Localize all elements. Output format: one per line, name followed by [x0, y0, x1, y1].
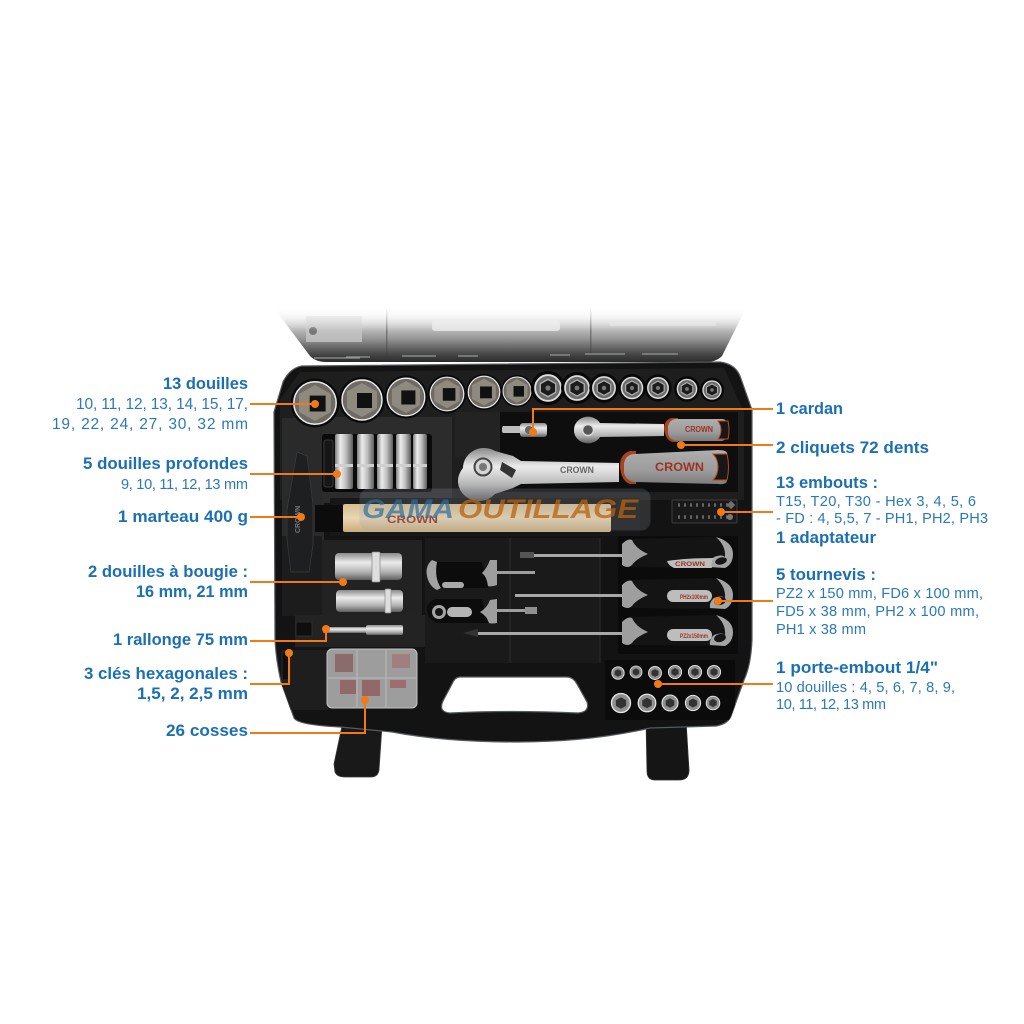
callout: 13 douilles: 10, 11, 12, 13, 14, 15, 17,: [76, 396, 248, 413]
short screwdriver top: [427, 560, 535, 590]
callout: 5 douilles profondes: [83, 455, 341, 493]
hex keys: [282, 622, 312, 680]
callout: 13 embouts: T15, T20, T30 - Hex 3, 4, 5, 6: [776, 494, 976, 510]
callout: 13 embouts: 1 adaptateur: [776, 529, 877, 547]
callout: 5 tournevis: FD5 x 38 mm, PH2 x 100 mm,: [776, 604, 979, 620]
callout: 5 tournevis: PH1 x 38 mm: [776, 622, 866, 638]
cardan: [502, 423, 547, 437]
case body: [274, 362, 752, 742]
callout: 3 cles hexagonales: [84, 649, 293, 703]
watermark GAMA OUTILLAGE: OUTILLAGE: [458, 494, 639, 524]
callout: 13 douilles: 19, 22, 24, 27, 30, 32 mm: [52, 416, 248, 433]
right latch: [646, 720, 689, 780]
screwdriver 3: [463, 615, 733, 646]
hammer: [287, 452, 611, 572]
large ratchet: CROWN: [560, 465, 594, 475]
extension bar: [323, 625, 403, 635]
watermark GAMA OUTILLAGE: [360, 489, 650, 530]
callout: 2 douilles a bougie: [88, 563, 347, 601]
callout: 2 cliquets: 2 cliquets 72 dents: [776, 439, 929, 457]
callout: 3 cles hexagonales: 1,5, 2, 2,5 mm: [137, 685, 248, 703]
small socket set: [612, 665, 721, 712]
callout: 13 douilles: 13 douilles: [163, 375, 248, 393]
callout: 13 embouts: [717, 474, 988, 547]
callout: 2 cliquets: [677, 439, 929, 457]
screwdriver 3: PZ2x150mm: [680, 634, 708, 640]
screwdriver 2: [515, 578, 733, 609]
screwdriver 1: CROWN: [675, 562, 705, 568]
callout: 13 douilles: [52, 375, 319, 433]
callout: 1 porte-embout: 1 porte-embout 1/4": [776, 659, 938, 677]
callout: 1 cardan: 1 cardan: [776, 400, 843, 418]
left latch: [334, 726, 382, 777]
small ratchet: CROWN: [685, 425, 713, 434]
callout: 5 tournevis: PZ2 x 150 mm, FD6 x 100 mm,: [776, 586, 983, 602]
callout: 13 embouts: 13 embouts :: [776, 474, 878, 492]
13 sockets row: [291, 371, 724, 427]
callout: 1 rallonge: 1 rallonge 75 mm: [113, 631, 248, 649]
callout: 5 tournevis: [714, 566, 983, 638]
embouts: [672, 500, 737, 523]
callout: 13 embouts: - FD : 4, 5,5, 7 - PH1, PH2, PH3: [776, 511, 988, 527]
callout: 1 marteau: [118, 508, 305, 526]
callout: 26 cosses: [166, 696, 369, 740]
callout: 1 porte-embout: 10, 11, 12, 13 mm: [776, 697, 886, 713]
callout: 26 cosses: 26 cosses: [166, 722, 248, 740]
callout: 1 cardan: [529, 400, 843, 436]
callout: 1 porte-embout: [654, 659, 955, 713]
callout: 5 douilles profondes: 9, 10, 11, 12, 13 mm: [121, 477, 248, 493]
short screwdriver bottom: [427, 599, 537, 624]
callout: 5 douilles profondes: 5 douilles profondes: [83, 455, 248, 473]
callout: 2 douilles a bougie: 16 mm, 21 mm: [136, 583, 248, 601]
cosses box: [327, 649, 417, 708]
5 deep sockets: [324, 434, 427, 489]
callout: 1 marteau: 1 marteau 400 g: [118, 508, 248, 526]
screwdriver 1: [520, 537, 733, 568]
callout: 5 tournevis: 5 tournevis :: [776, 566, 876, 584]
open lid fading upward: [274, 307, 746, 362]
spark plug sockets: [335, 552, 403, 613]
tray panels: [280, 368, 744, 720]
callout: 1 porte-embout: 10 douilles : 4, 5, 6, 7, 8, 9,: [776, 680, 955, 696]
small ratchet: [574, 417, 729, 443]
large ratchet: CROWN: [655, 462, 704, 474]
hammer: CROWN: [387, 514, 438, 526]
screwdriver 2: PH2x100mm: [680, 595, 708, 601]
large ratchet: [458, 448, 728, 501]
callout: 1 rallonge: [113, 625, 330, 649]
callout: 2 douilles a bougie: 2 douilles à bougie :: [88, 563, 248, 581]
callout: 3 cles hexagonales: 3 clés hexagonales :: [84, 665, 248, 683]
hammer: CROWN: [295, 506, 302, 533]
watermark GAMA OUTILLAGE: GAMA: [362, 494, 454, 524]
